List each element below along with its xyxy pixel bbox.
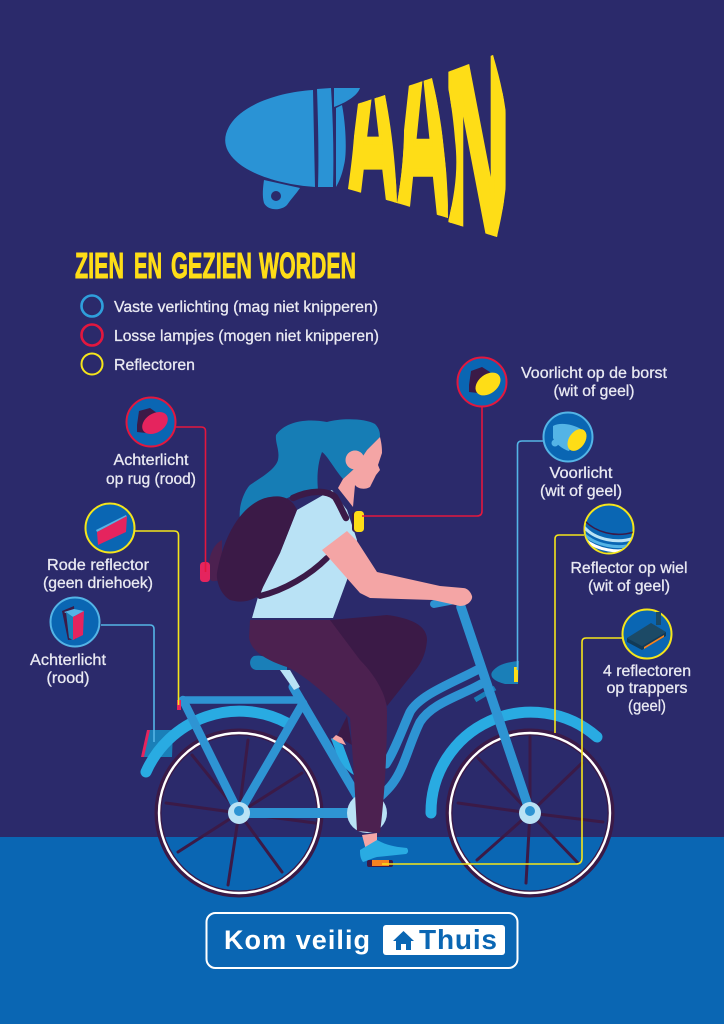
front carrier lamp xyxy=(475,661,519,700)
label: op trappers xyxy=(606,680,688,697)
callout: achterlicht op rug xyxy=(106,398,196,488)
callout: achterlicht xyxy=(30,598,107,687)
hair xyxy=(240,419,380,521)
backpack straps xyxy=(260,492,346,596)
callout: voorlicht op de borst xyxy=(458,358,668,406)
legend item: reflectoren: Reflectoren xyxy=(114,357,195,374)
back lamp xyxy=(200,562,210,582)
backpack xyxy=(217,496,297,602)
label xyxy=(603,663,691,715)
legend item: reflectoren xyxy=(82,354,195,374)
frame xyxy=(183,600,530,813)
icon: pedal reflector xyxy=(622,610,672,658)
label: (geel) xyxy=(628,698,666,715)
arm xyxy=(322,531,472,606)
logo: Kom veilig Thuis xyxy=(206,913,518,968)
rear reflector xyxy=(177,700,181,710)
heading xyxy=(75,245,356,286)
label: 4 reflectoren xyxy=(603,663,691,680)
logo text: Kom veilig: Kom veilig xyxy=(224,925,370,955)
label xyxy=(30,652,107,687)
heading: EN xyxy=(134,245,162,286)
label: (geen driehoek) xyxy=(43,575,153,592)
label: (wit of geel) xyxy=(540,483,622,500)
label: (rood) xyxy=(46,670,90,687)
sock xyxy=(280,670,300,690)
far foot xyxy=(331,716,354,775)
icon: bicycle lamp xyxy=(225,88,360,209)
heading: ZIEN xyxy=(75,245,124,286)
label xyxy=(43,557,153,592)
logo badge: Thuis: Thuis xyxy=(419,924,497,955)
callout: reflector op wiel xyxy=(570,504,688,595)
near leg xyxy=(249,620,387,833)
legend item: vaste verlichting: Vaste verlichting (mag niet knipperen) xyxy=(114,299,378,316)
connector lines xyxy=(101,407,622,864)
label: Voorlicht xyxy=(550,465,613,482)
shirt xyxy=(252,490,357,618)
label xyxy=(570,560,688,595)
icon: front light xyxy=(544,412,592,462)
heading: GEZIEN xyxy=(171,245,252,286)
rear light xyxy=(141,730,173,757)
connector: voorlicht op de borst xyxy=(362,407,482,516)
AAN lettering: N xyxy=(444,0,510,299)
label xyxy=(521,365,668,400)
legend item: losse lampjes: Losse lampjes (mogen niet knipperen) xyxy=(114,328,379,345)
icon: chest light xyxy=(458,358,506,406)
bicycle xyxy=(141,600,611,894)
hubs xyxy=(228,793,541,833)
far leg xyxy=(330,615,427,706)
connector: rode reflector xyxy=(135,531,178,705)
headline: lamp with AAN xyxy=(225,55,506,237)
hub centres xyxy=(234,806,535,816)
label: (wit of geel) xyxy=(588,578,670,595)
label: op rug (rood) xyxy=(106,471,196,488)
saddle xyxy=(250,656,287,670)
label: (wit of geel) xyxy=(554,383,634,400)
callout: 4 reflectoren op trappers xyxy=(603,610,691,715)
chest lamp xyxy=(352,511,364,532)
connector: reflector op wiel xyxy=(555,535,584,733)
icon: rear light xyxy=(50,598,100,646)
rear pocket of backpack xyxy=(209,540,222,581)
rear wheel xyxy=(158,732,320,894)
legend xyxy=(82,296,379,374)
connector: achterlicht op rug xyxy=(176,427,206,572)
callout: voorlicht xyxy=(540,412,622,500)
label: Rode reflector xyxy=(47,557,150,574)
icon: rear light on back xyxy=(126,398,176,446)
connector: reflectoren op trappers xyxy=(382,638,622,864)
label xyxy=(540,465,622,500)
label: Achterlicht xyxy=(114,452,189,469)
connector: voorlicht xyxy=(518,441,543,670)
label: Achterlicht xyxy=(30,652,107,669)
AAN lettering xyxy=(348,55,506,237)
cyclist xyxy=(200,419,472,867)
front wheel xyxy=(449,732,611,894)
heading: WORDEN xyxy=(259,245,356,286)
mudguards xyxy=(146,711,597,813)
icon: red reflector xyxy=(86,504,134,552)
near foot and shoe xyxy=(360,833,408,867)
connector: achterlicht xyxy=(101,625,154,742)
label: Voorlicht op de borst xyxy=(521,365,668,382)
head and neck xyxy=(338,437,382,507)
ground xyxy=(0,837,724,1024)
logo badge: Thuis xyxy=(383,924,505,955)
AAN lettering: A xyxy=(345,0,401,256)
label xyxy=(106,452,196,488)
callout: rode reflector xyxy=(43,504,153,592)
label: Reflector op wiel xyxy=(570,560,688,577)
icon: wheel reflector xyxy=(584,504,634,556)
